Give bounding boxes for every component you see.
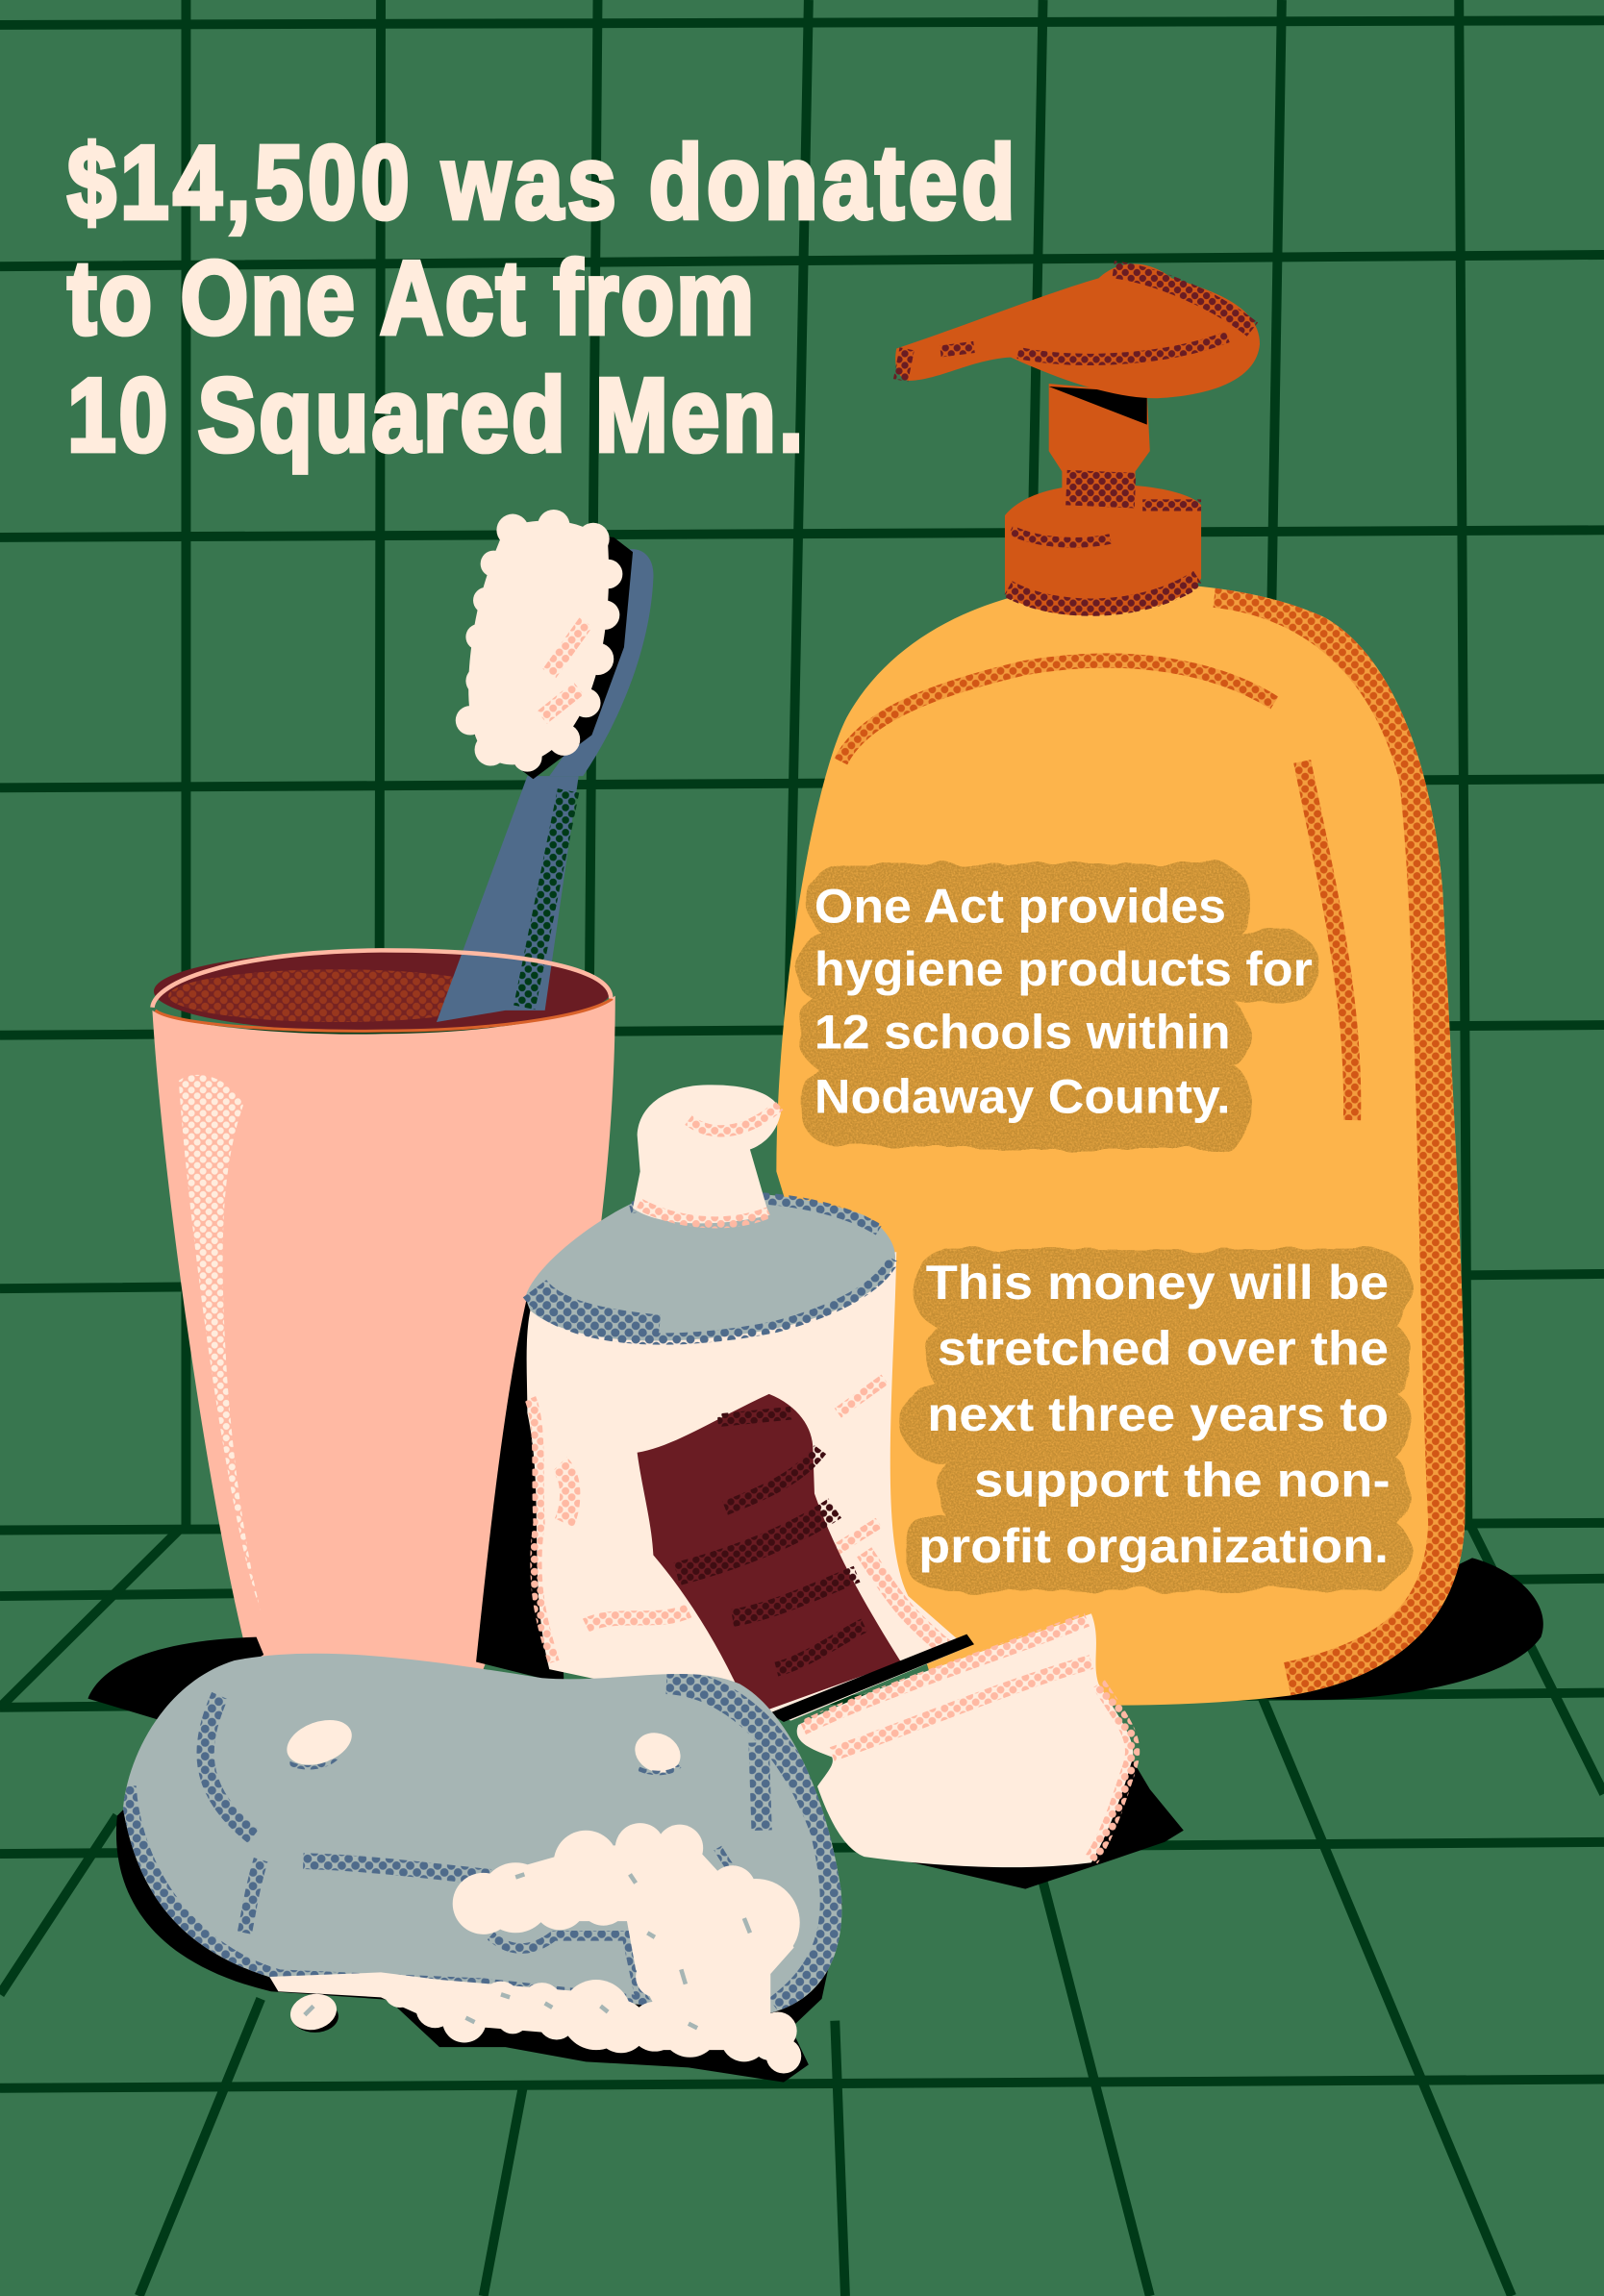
callout text: next three years to	[927, 1387, 1389, 1441]
callout text: 12 schools within	[815, 1005, 1231, 1059]
bottle halftone shading	[840, 583, 1453, 1686]
small bubble	[291, 2000, 338, 2033]
soap dispenser bottle	[776, 263, 1466, 1706]
title: 10 Squared Men.	[67, 359, 803, 474]
callout text: profit organization.	[918, 1519, 1389, 1573]
soap shadow	[88, 1637, 842, 2028]
text callout: hygiene products	[795, 864, 1319, 1148]
callout text: support the non-	[974, 1453, 1391, 1507]
pump dotted shading	[896, 269, 1252, 608]
tube dotted shading	[530, 1380, 945, 1662]
crimp shadow	[850, 1728, 1184, 1889]
tube maroon label	[638, 1394, 901, 1716]
toothbrush bristles	[456, 510, 633, 779]
title: $14,500 was donated	[67, 126, 1015, 241]
toothbrush inside the cup	[437, 776, 579, 1022]
callout text: stretched over the	[938, 1321, 1389, 1375]
tube shadow	[476, 1296, 564, 1684]
soap body	[123, 1654, 841, 2013]
tube cap	[633, 1085, 781, 1223]
cup	[152, 776, 615, 1677]
callout background	[795, 864, 1319, 1148]
crimp shape	[797, 1613, 1133, 1867]
title: to One Act from	[67, 241, 754, 357]
brush handle rear	[549, 549, 654, 776]
callout text: This money will be	[926, 1256, 1389, 1310]
foam shadow	[395, 2006, 809, 2083]
callout text: One Act provides	[815, 879, 1226, 933]
toothbrush back part	[549, 549, 654, 776]
bottle shadow	[1260, 1558, 1543, 1700]
toothpaste tube	[476, 1085, 966, 1720]
soap bar	[88, 1637, 842, 2083]
text callout: money stretched	[902, 1249, 1412, 1590]
callout text: hygiene products for	[815, 942, 1313, 996]
cup inner rim	[154, 950, 611, 1033]
foam spots	[305, 1874, 750, 2028]
bottle body	[776, 584, 1466, 1706]
pump neck	[1049, 384, 1150, 505]
soap dotted shading	[126, 1681, 833, 2009]
callout background	[902, 1249, 1412, 1590]
title	[67, 126, 1015, 474]
tube grey shoulder	[526, 1192, 895, 1340]
pump head	[895, 263, 1260, 398]
tube crimped end	[769, 1613, 1184, 1889]
callout text	[918, 1256, 1391, 1573]
pump collar	[1005, 485, 1201, 615]
callout text	[815, 879, 1313, 1123]
foam	[269, 1823, 801, 2074]
cup body	[152, 996, 615, 1677]
cup highlight	[179, 1075, 261, 1610]
soap bubbles on surface	[281, 1711, 358, 1773]
tube body	[527, 1252, 966, 1720]
callout text: Nodaway County.	[815, 1069, 1231, 1123]
